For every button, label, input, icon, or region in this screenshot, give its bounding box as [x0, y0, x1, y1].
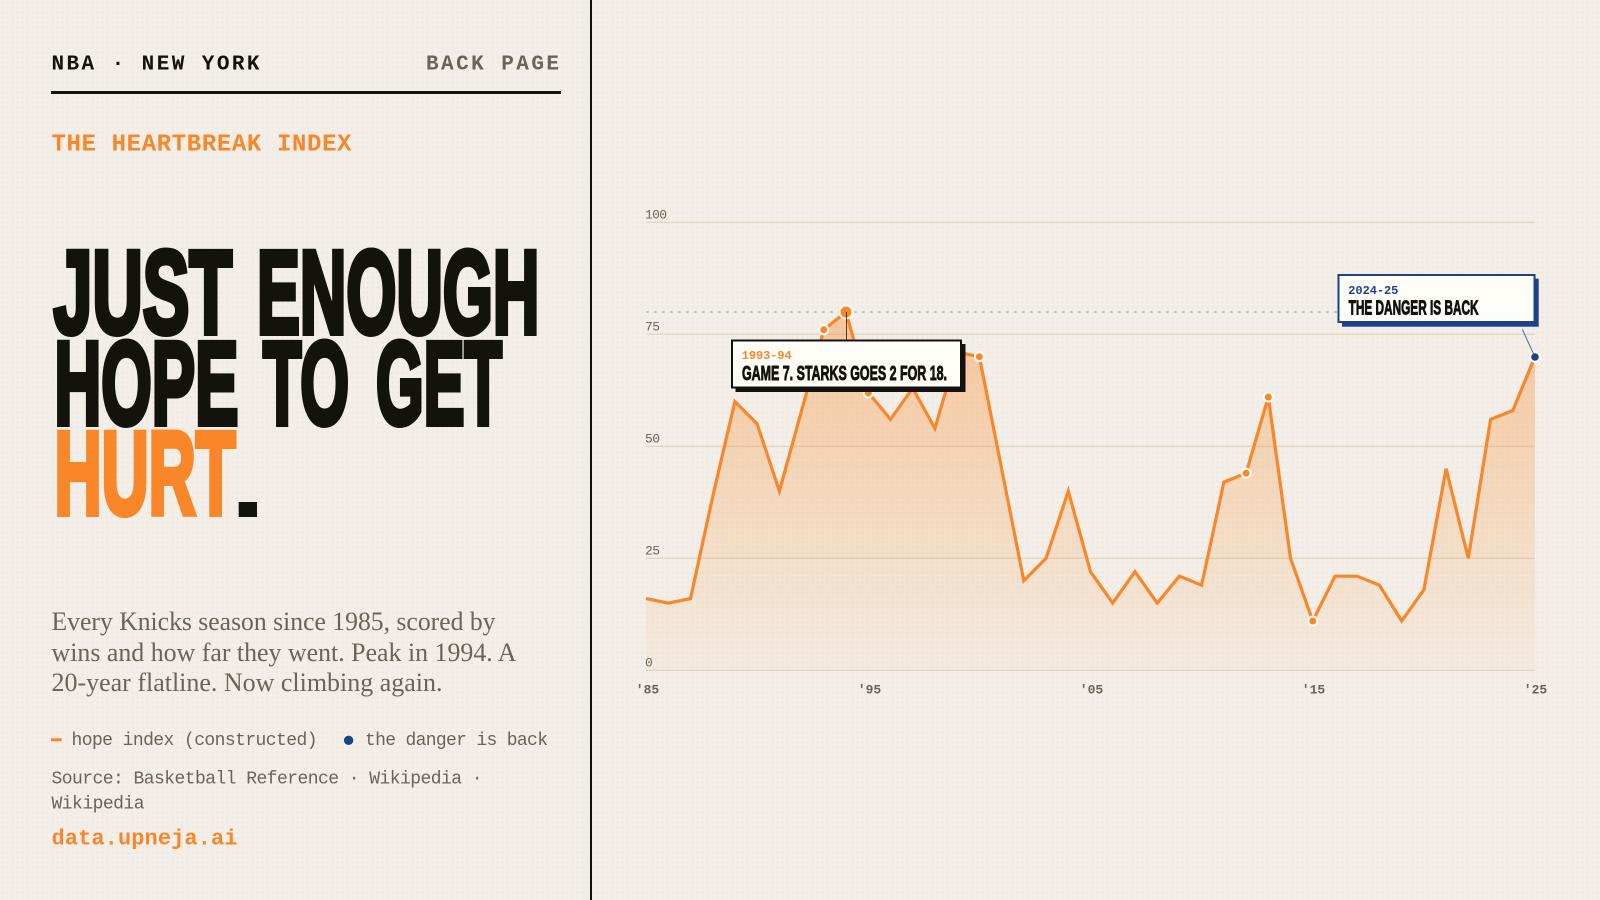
- site link: data.upneja.ai: [52, 826, 238, 852]
- title: [54, 227, 539, 540]
- source note: Source: Basketball Reference · Wikipedia ·: [52, 770, 482, 790]
- kicker: THE HEARTBREAK INDEX: [52, 132, 352, 158]
- y axis grid and labels: 25: [645, 544, 660, 558]
- masthead: [51, 54, 561, 94]
- hope index line: [646, 312, 1535, 621]
- panel divider: [590, 0, 592, 900]
- callout: 2024-25: 2024-25: [1348, 284, 1398, 298]
- callout: 2024-25: [1338, 275, 1539, 357]
- season markers: [819, 306, 1540, 626]
- callout: 1993-94: GAME 7. STARKS GOES 2 FOR 18.: [742, 363, 947, 385]
- source note: Wikipedia: [52, 794, 145, 814]
- title: HURT: [54, 408, 235, 540]
- callout: 1993-94: [732, 312, 966, 392]
- callout: 2024-25: THE DANGER IS BACK: [1349, 298, 1479, 320]
- reference line at peak: [646, 311, 1535, 313]
- x axis labels: '95: [858, 682, 881, 698]
- legend: [51, 731, 548, 751]
- intro text: Every Knicks season since 1985, scored by: [52, 607, 496, 636]
- callout: 1993-94: 1993-94: [742, 349, 792, 363]
- x axis labels: '85: [636, 682, 659, 698]
- title: ENOUGH: [257, 227, 539, 359]
- legend: hope index (constructed): [72, 731, 318, 751]
- masthead: NBA · NEW YORK: [52, 54, 260, 76]
- y axis grid and labels: 50: [645, 432, 660, 446]
- legend: the danger is back: [365, 731, 548, 751]
- intro text: 20-year flatline. Now climbing again.: [52, 668, 442, 697]
- title: GET: [376, 318, 502, 450]
- panel: line chart: [636, 208, 1547, 698]
- area under hope index: [646, 312, 1535, 670]
- panel: headline and story: [51, 54, 561, 852]
- y axis grid and labels: 100: [645, 208, 667, 222]
- title: HOPE: [54, 318, 238, 450]
- y axis grid and labels: 75: [645, 320, 660, 334]
- x axis labels: '25: [1524, 682, 1547, 698]
- x axis labels: '15: [1302, 682, 1325, 698]
- intro text: wins and how far they went. Peak in 1994. A: [52, 638, 517, 667]
- title: JUST: [54, 227, 232, 359]
- x axis labels: [636, 682, 1547, 698]
- intro text: [52, 607, 517, 697]
- title: TO: [263, 318, 349, 450]
- masthead: BACK PAGE: [426, 54, 559, 76]
- x axis labels: '05: [1080, 682, 1103, 698]
- y axis grid and labels: [645, 208, 1535, 670]
- source note: [52, 770, 482, 814]
- y axis grid and labels: 0: [645, 656, 653, 670]
